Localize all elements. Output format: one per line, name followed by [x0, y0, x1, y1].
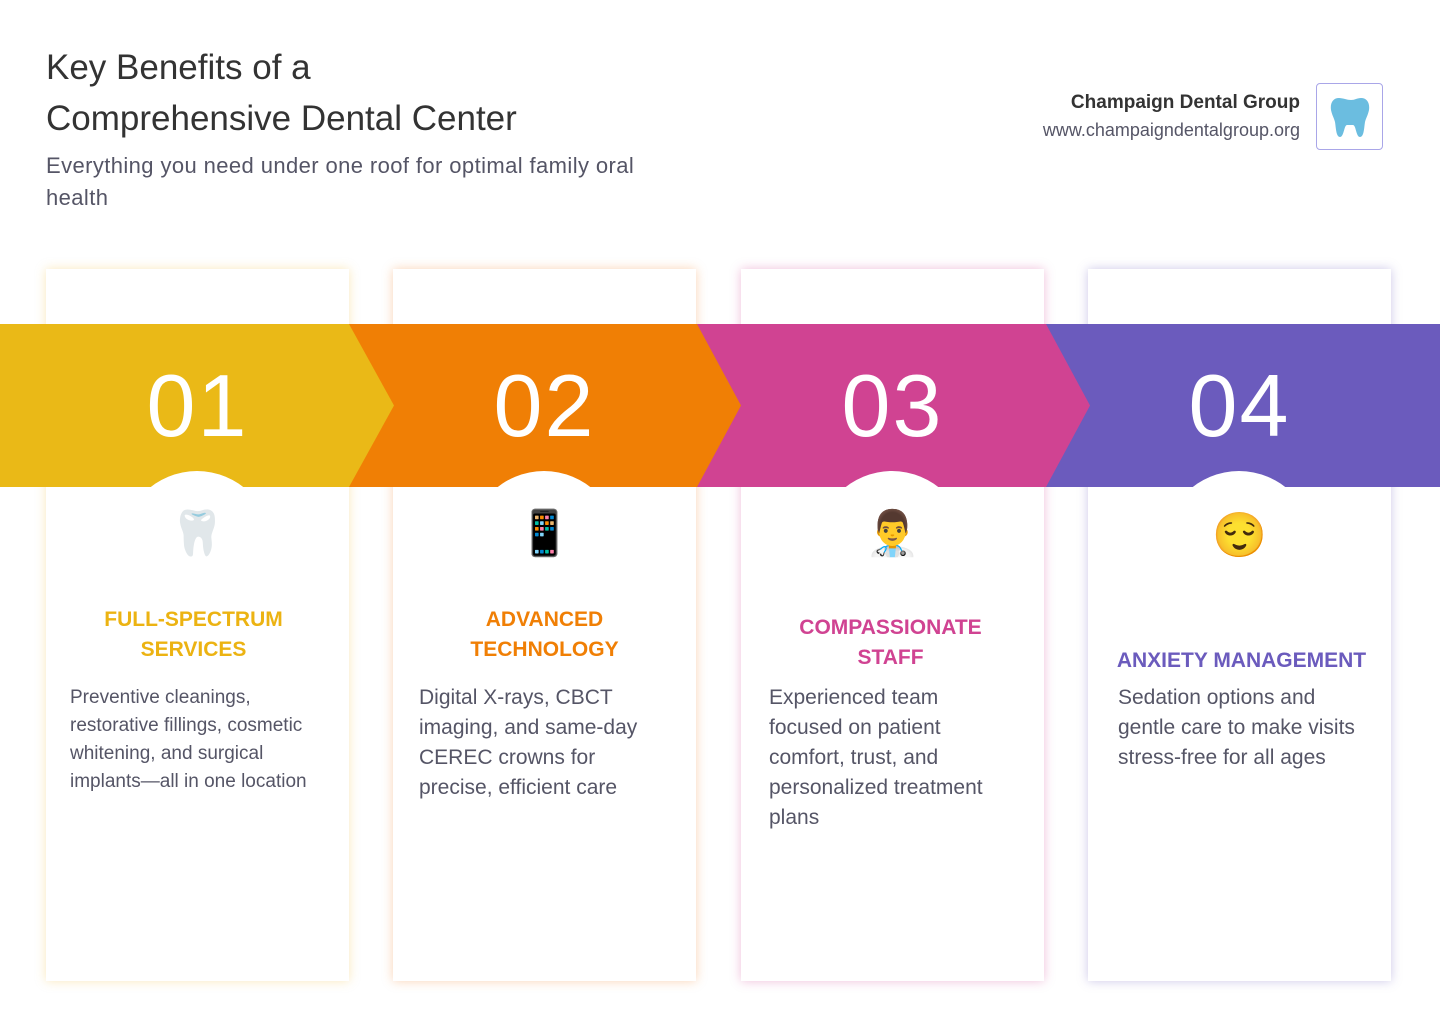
panel: advanced technology: [419, 507, 638, 799]
body: gentle care to make visits stress-free for all ages: [1118, 716, 1355, 769]
panel: anxiety management: [1117, 509, 1366, 769]
panel: full-spectrum services: [70, 507, 307, 792]
arrow band: [0, 324, 1440, 487]
title: Key Benefits of a: [46, 48, 311, 87]
card backgrounds: [46, 269, 349, 981]
icon: tooth: 🦷: [170, 507, 225, 559]
icon: doctor: 👨‍⚕️: [865, 507, 920, 559]
heading: TECHNOLOGY: [470, 638, 619, 661]
brand name: Champaign Dental Group: [1071, 92, 1300, 113]
number 03: 03: [842, 356, 943, 455]
title: [46, 48, 517, 138]
heading: SERVICES: [141, 638, 246, 661]
body: [1118, 686, 1355, 769]
heading: [104, 608, 283, 661]
number 01: 01: [147, 356, 248, 455]
heading: STAFF: [857, 646, 924, 669]
panel: compassionate staff: [769, 507, 983, 829]
heading: [799, 616, 982, 669]
body: Sedation options and: [1118, 686, 1315, 709]
heading: FULL-SPECTRUM: [104, 608, 283, 631]
heading: [470, 608, 619, 661]
brand block: [1042, 83, 1383, 150]
icon: phone: 📱: [517, 507, 572, 559]
title: Comprehensive Dental Center: [46, 99, 517, 138]
heading: COMPASSIONATE: [799, 616, 982, 639]
number 02: 02: [494, 356, 595, 455]
number 04: 04: [1189, 356, 1290, 455]
heading: ADVANCED: [486, 608, 603, 631]
icon: logo tooth: [1316, 83, 1383, 150]
icon: relieved face: 😌: [1212, 509, 1267, 561]
brand url: www.champaigndentalgroup.org: [1043, 120, 1300, 140]
heading: ANXIETY MANAGEMENT: [1117, 649, 1366, 672]
body: Preventive cleanings, restorative fillings, cosmetic whitening, and surgical implants—all in one location: [70, 687, 307, 792]
subtitle: Everything you need under one roof for optimal family oral health: [46, 153, 634, 210]
body: Experienced team focused on patient comfort, trust, and personalized treatment plans: [769, 686, 983, 829]
body: Digital X-rays, CBCT imaging, and same-day CEREC crowns for precise, efficient care: [419, 686, 637, 799]
